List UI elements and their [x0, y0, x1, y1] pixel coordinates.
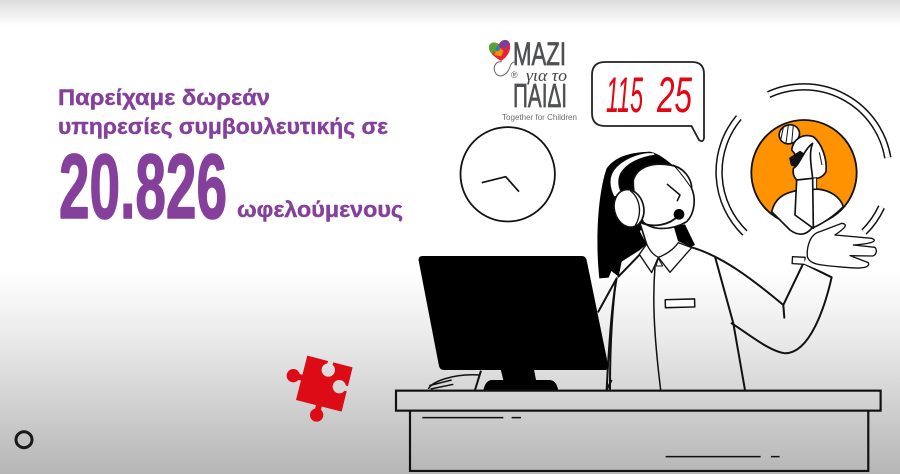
text: beneficiaries: ωφελούμενους: [237, 197, 403, 222]
caller phone: [790, 152, 805, 167]
logo icon: puzzle heart balloon: [489, 40, 515, 76]
text: second line: υπηρεσίες συμβουλευτικής σε: [58, 114, 389, 139]
computer monitor: [419, 256, 608, 391]
caller hand and arm: [793, 143, 813, 228]
caller body: [772, 189, 843, 234]
agent microphone: [640, 216, 678, 225]
agent headband: [610, 153, 655, 197]
agent head and headset: [597, 152, 695, 278]
agent collar: [639, 243, 692, 273]
text: first line: Παρείχαμε δωρεάν: [58, 85, 270, 110]
desk base: [410, 411, 868, 471]
big number: 20.826: [59, 136, 227, 238]
logo: Mazi gia to Paidi: [489, 36, 577, 122]
agent shirt and sleeve: [598, 247, 832, 390]
caller hair bun: [776, 122, 803, 147]
agent raised hand: [792, 223, 876, 274]
agent face: [633, 164, 694, 228]
agent name badge: [665, 299, 695, 308]
icon: ring marker: [16, 432, 32, 448]
orange disc: [751, 120, 857, 225]
agent body: [598, 223, 876, 390]
agent earpiece: [610, 186, 648, 230]
icon: red puzzle piece: [286, 356, 353, 422]
agent hair: [597, 152, 673, 278]
helpline digits: 25: [656, 67, 692, 123]
caller portrait in orange circle: [751, 120, 857, 234]
caller head: [792, 136, 826, 179]
reception desk: [396, 391, 881, 471]
icon: wall clock: [460, 127, 555, 222]
helpline digits: 115: [606, 67, 643, 123]
logo registered mark: ®: [511, 70, 518, 80]
headline text: [58, 85, 403, 238]
agent neck: [640, 223, 678, 257]
logo word: MAZI: ΜΑΖΙ: [513, 36, 566, 72]
speech bubble with helpline number: [592, 62, 704, 141]
agent figure: [597, 152, 876, 390]
logo word: for the: για το: [526, 66, 567, 85]
logo word: PAIDI: ΠΑΙΔΙ: [513, 77, 567, 114]
desk top: [396, 391, 881, 411]
logo tagline: Together for Children: [502, 112, 577, 122]
agent lower body and resting hand: [428, 280, 616, 390]
signal arcs around caller: [719, 87, 888, 233]
